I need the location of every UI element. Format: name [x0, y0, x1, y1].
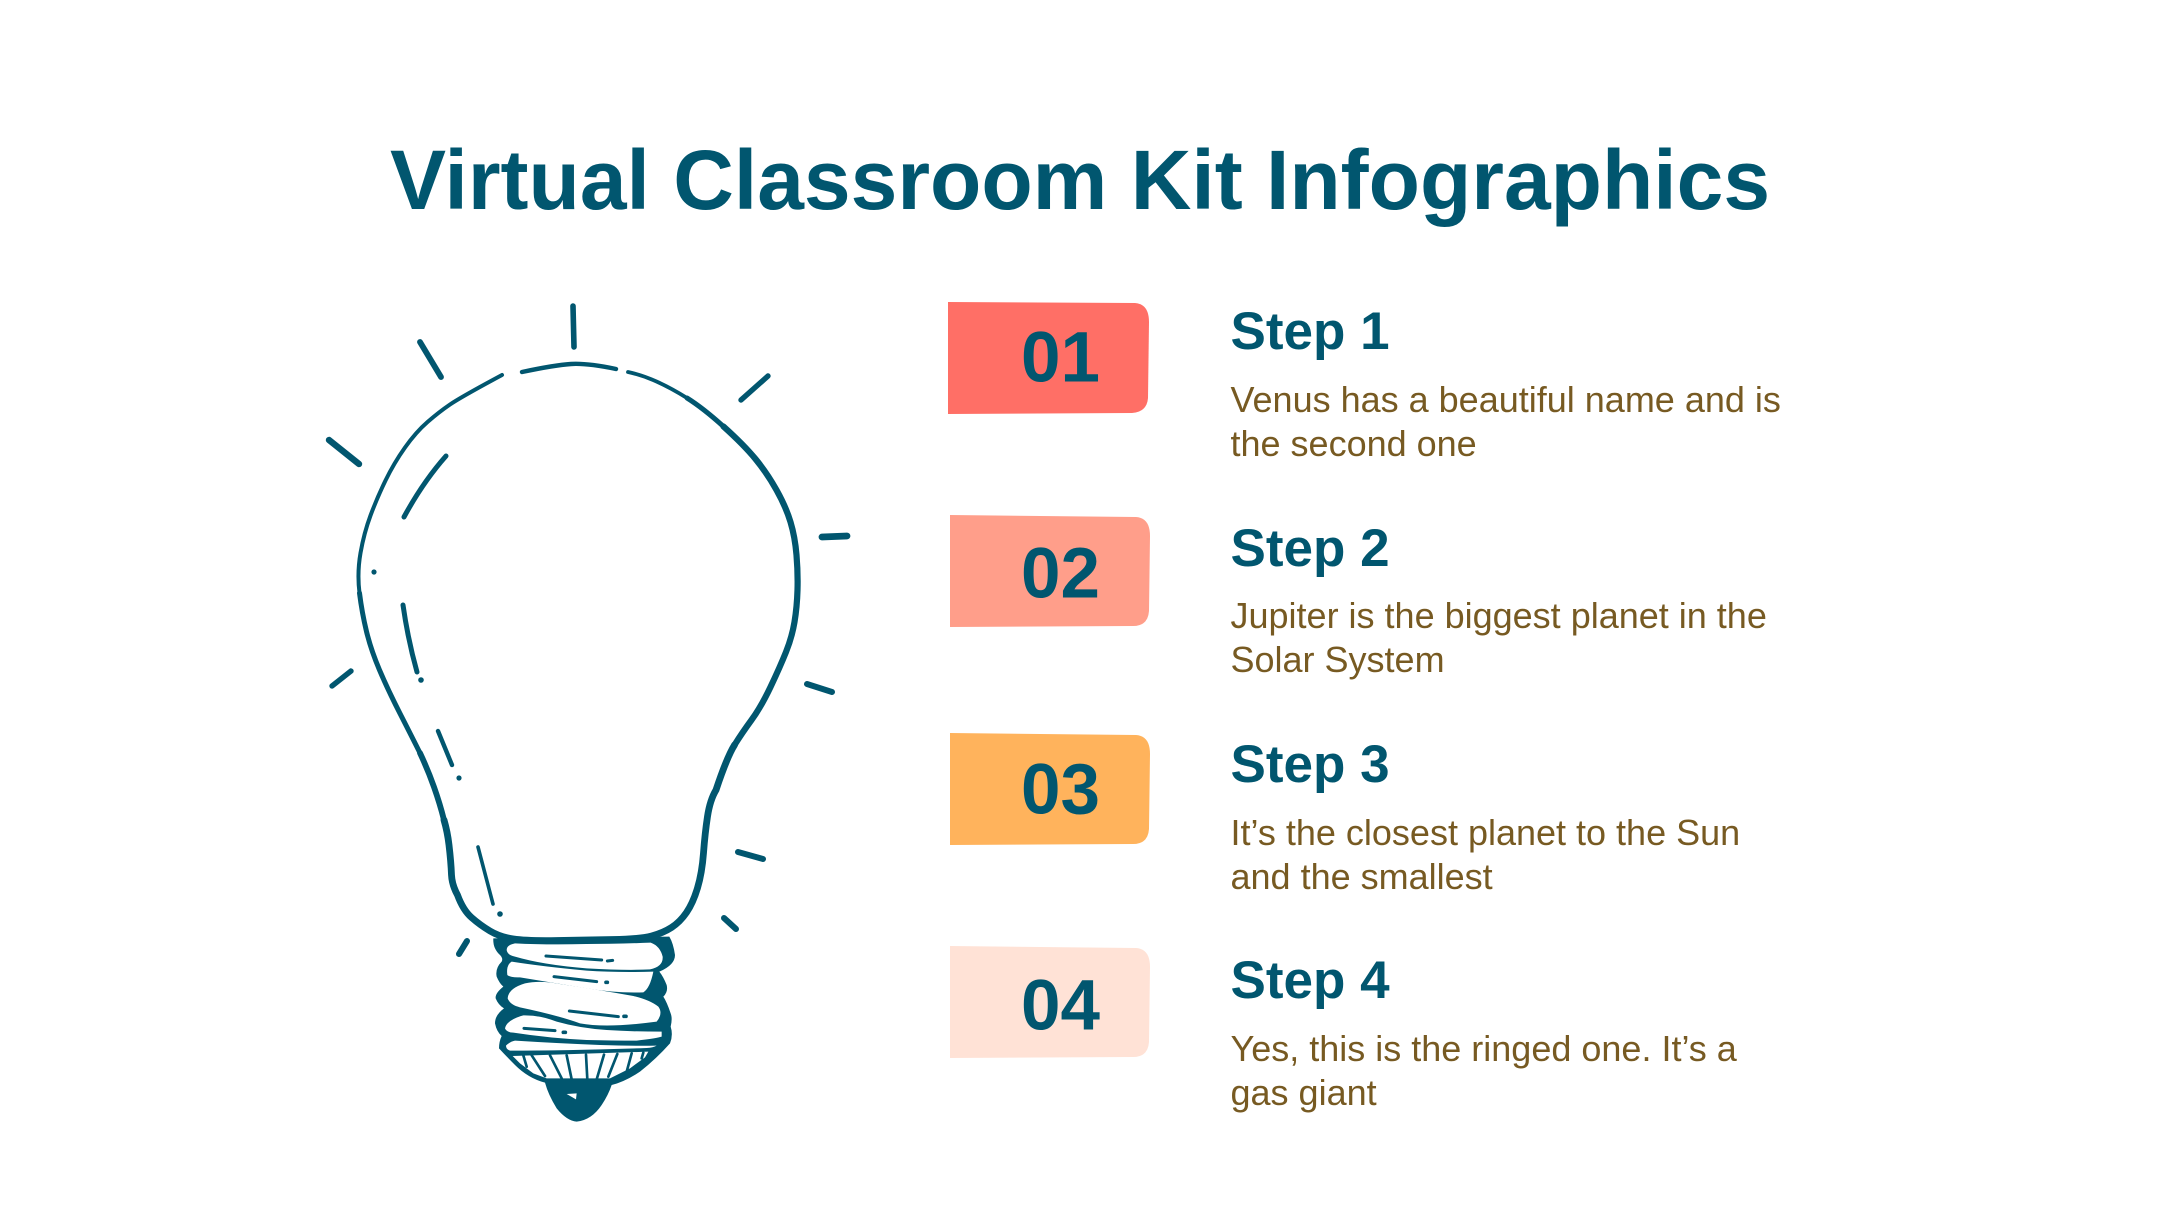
step 3 description: It’s the closest planet to the Sun	[1230, 812, 1740, 853]
step 4 description: Yes, this is the ringed one. It’s a	[1230, 1028, 1738, 1069]
highlight dots	[371, 569, 503, 917]
light rays	[329, 306, 847, 954]
step 2	[950, 515, 1767, 680]
step 1	[948, 302, 1781, 464]
step 2 description: Solar System	[1230, 639, 1445, 680]
number 01: 01	[1021, 318, 1100, 398]
number 03: 03	[1021, 750, 1100, 830]
bulb screw base	[493, 937, 675, 1122]
glass highlights	[403, 456, 493, 904]
number 02: 02	[1021, 534, 1100, 614]
step 3 heading: Step 3	[1230, 735, 1390, 794]
step 1 heading: Step 1	[1230, 302, 1390, 361]
step 1 description: the second one	[1230, 423, 1477, 464]
step 2 description: Jupiter is the biggest planet in the	[1230, 595, 1767, 636]
step 1 description: Venus has a beautiful name and is	[1230, 379, 1781, 420]
step 3 description: and the smallest	[1230, 856, 1493, 897]
badge 04	[950, 946, 1150, 1058]
bulb glass outline	[358, 364, 798, 941]
step 3	[950, 733, 1740, 897]
number 04: 04	[1021, 966, 1100, 1046]
badge 02	[950, 515, 1150, 627]
title: Virtual Classroom Kit Infographics	[390, 133, 1770, 227]
icon: light bulb	[329, 306, 847, 1122]
step 2 heading: Step 2	[1230, 519, 1390, 578]
step 4	[950, 946, 1738, 1113]
step 4 description: gas giant	[1230, 1072, 1377, 1113]
badge 03	[950, 733, 1150, 845]
step 4 heading: Step 4	[1230, 951, 1390, 1010]
badge 01	[948, 302, 1149, 414]
